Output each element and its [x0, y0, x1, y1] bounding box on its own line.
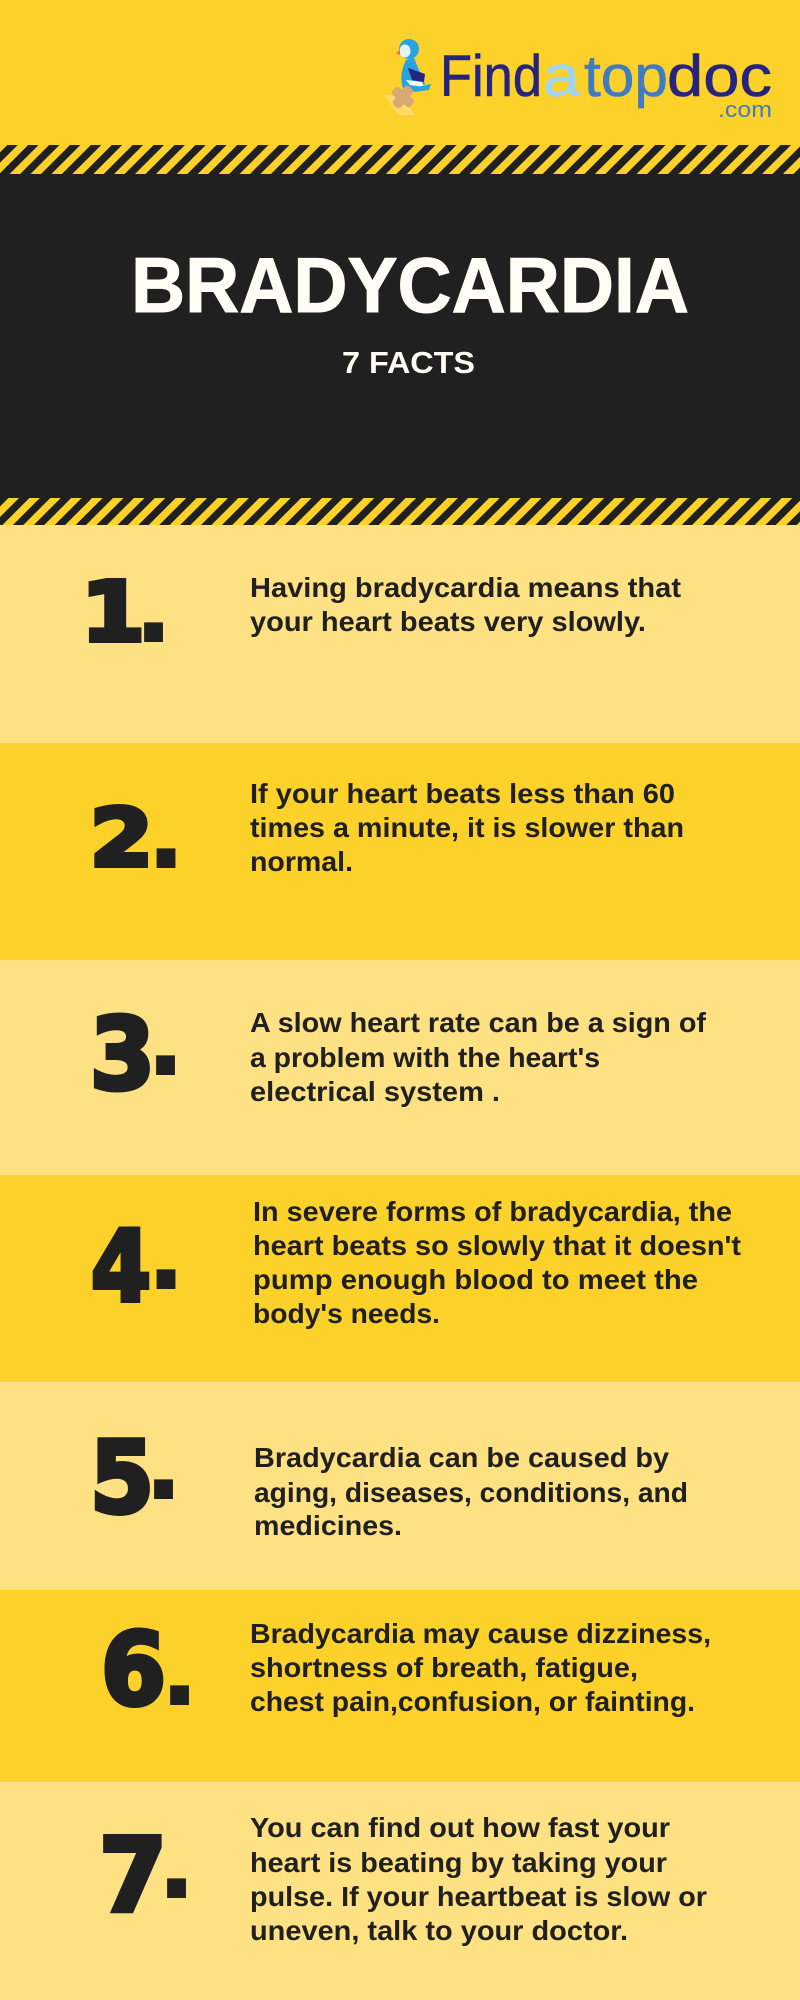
fact 4 text: In severe forms of bradycardia, the	[253, 1196, 732, 1227]
fact 7 text	[250, 1812, 707, 1946]
fact 4 text: heart beats so slowly that it doesn't	[253, 1230, 741, 1261]
logo wordmark: top	[584, 44, 668, 109]
fact 4 text	[253, 1196, 741, 1329]
panel: fact 5	[0, 1382, 800, 1590]
panel: fact 2	[0, 743, 800, 960]
fact 6 text: shortness of breath, fatigue,	[250, 1652, 638, 1683]
logo wordmark: .com	[718, 97, 772, 122]
fact 6 text	[250, 1618, 711, 1717]
fact 3 text: A slow heart rate can be a sign of	[250, 1007, 707, 1038]
title: BRADYCARDIA	[131, 241, 689, 329]
number 1: 1	[81, 566, 145, 660]
number 3: 3	[90, 998, 155, 1112]
logo: Findatopdoc.com	[384, 39, 772, 122]
fact 2 text: normal.	[250, 846, 353, 877]
fact 2 text: times a minute, it is slower than	[250, 812, 684, 843]
number 4	[91, 1193, 181, 1324]
number 7	[99, 1802, 191, 1936]
number 7: 7	[99, 1816, 167, 1936]
number 2	[90, 772, 181, 889]
number 5: 5	[90, 1421, 154, 1536]
fact 5 text	[254, 1442, 688, 1541]
hazard stripe top	[0, 145, 800, 174]
fact 4 text: body's needs.	[253, 1298, 440, 1329]
fact 7 text: heart is beating by taking your	[250, 1847, 667, 1878]
fact 5 text: Bradycardia can be caused by	[254, 1442, 669, 1473]
fact 3 text: a problem with the heart's	[250, 1042, 600, 1073]
fact 7 text: pulse. If your heartbeat is slow or	[250, 1881, 707, 1912]
fact 5 text: aging, diseases, conditions, and	[254, 1477, 688, 1508]
number 6: 6	[101, 1611, 166, 1728]
fact 3 text	[250, 1007, 707, 1107]
fact 2 text	[250, 778, 684, 877]
number 4: .	[152, 1193, 181, 1310]
number 5	[90, 1403, 178, 1536]
panel: fact 1	[0, 525, 800, 743]
panel: fact 6	[0, 1590, 800, 1782]
panel: fact 3	[0, 960, 800, 1175]
number 2: .	[152, 772, 181, 889]
number 6: .	[165, 1609, 194, 1726]
title panel	[0, 174, 800, 498]
subtitle: 7 FACTS	[342, 345, 475, 380]
header background	[0, 0, 800, 145]
number 1	[81, 546, 168, 663]
fact 1 text: Having bradycardia means that	[250, 572, 681, 603]
panel: fact 7	[0, 1782, 800, 2000]
fact 4 text: pump enough blood to meet the	[253, 1264, 698, 1295]
logo wordmark	[440, 44, 772, 122]
logo wordmark: a	[543, 44, 581, 109]
fact 5 text: medicines.	[254, 1510, 402, 1541]
number 3: .	[151, 979, 180, 1096]
logo wordmark: Find	[440, 44, 542, 109]
fact 1 text	[250, 572, 681, 637]
number 3	[90, 979, 180, 1112]
number 1: .	[139, 546, 168, 663]
hazard stripe bottom	[0, 498, 800, 525]
number 5: .	[149, 1403, 178, 1520]
fact 1 text: your heart beats very slowly.	[250, 606, 646, 637]
number 4: 4	[91, 1210, 151, 1324]
number 2: 2	[90, 792, 153, 884]
fact 3 text: electrical system .	[250, 1076, 500, 1107]
icon: penguin mascot with bandage	[384, 39, 431, 115]
logo wordmark: doc	[667, 44, 772, 109]
fact 2 text: If your heart beats less than 60	[250, 778, 675, 809]
fact 7 text: uneven, talk to your doctor.	[250, 1915, 628, 1946]
panel: fact 4	[0, 1175, 800, 1382]
fact 7 text: You can find out how fast your	[250, 1812, 670, 1843]
fact 6 text: chest pain,confusion, or fainting.	[250, 1686, 695, 1717]
number 7: .	[162, 1802, 191, 1919]
fact 6 text: Bradycardia may cause dizziness,	[250, 1618, 711, 1649]
